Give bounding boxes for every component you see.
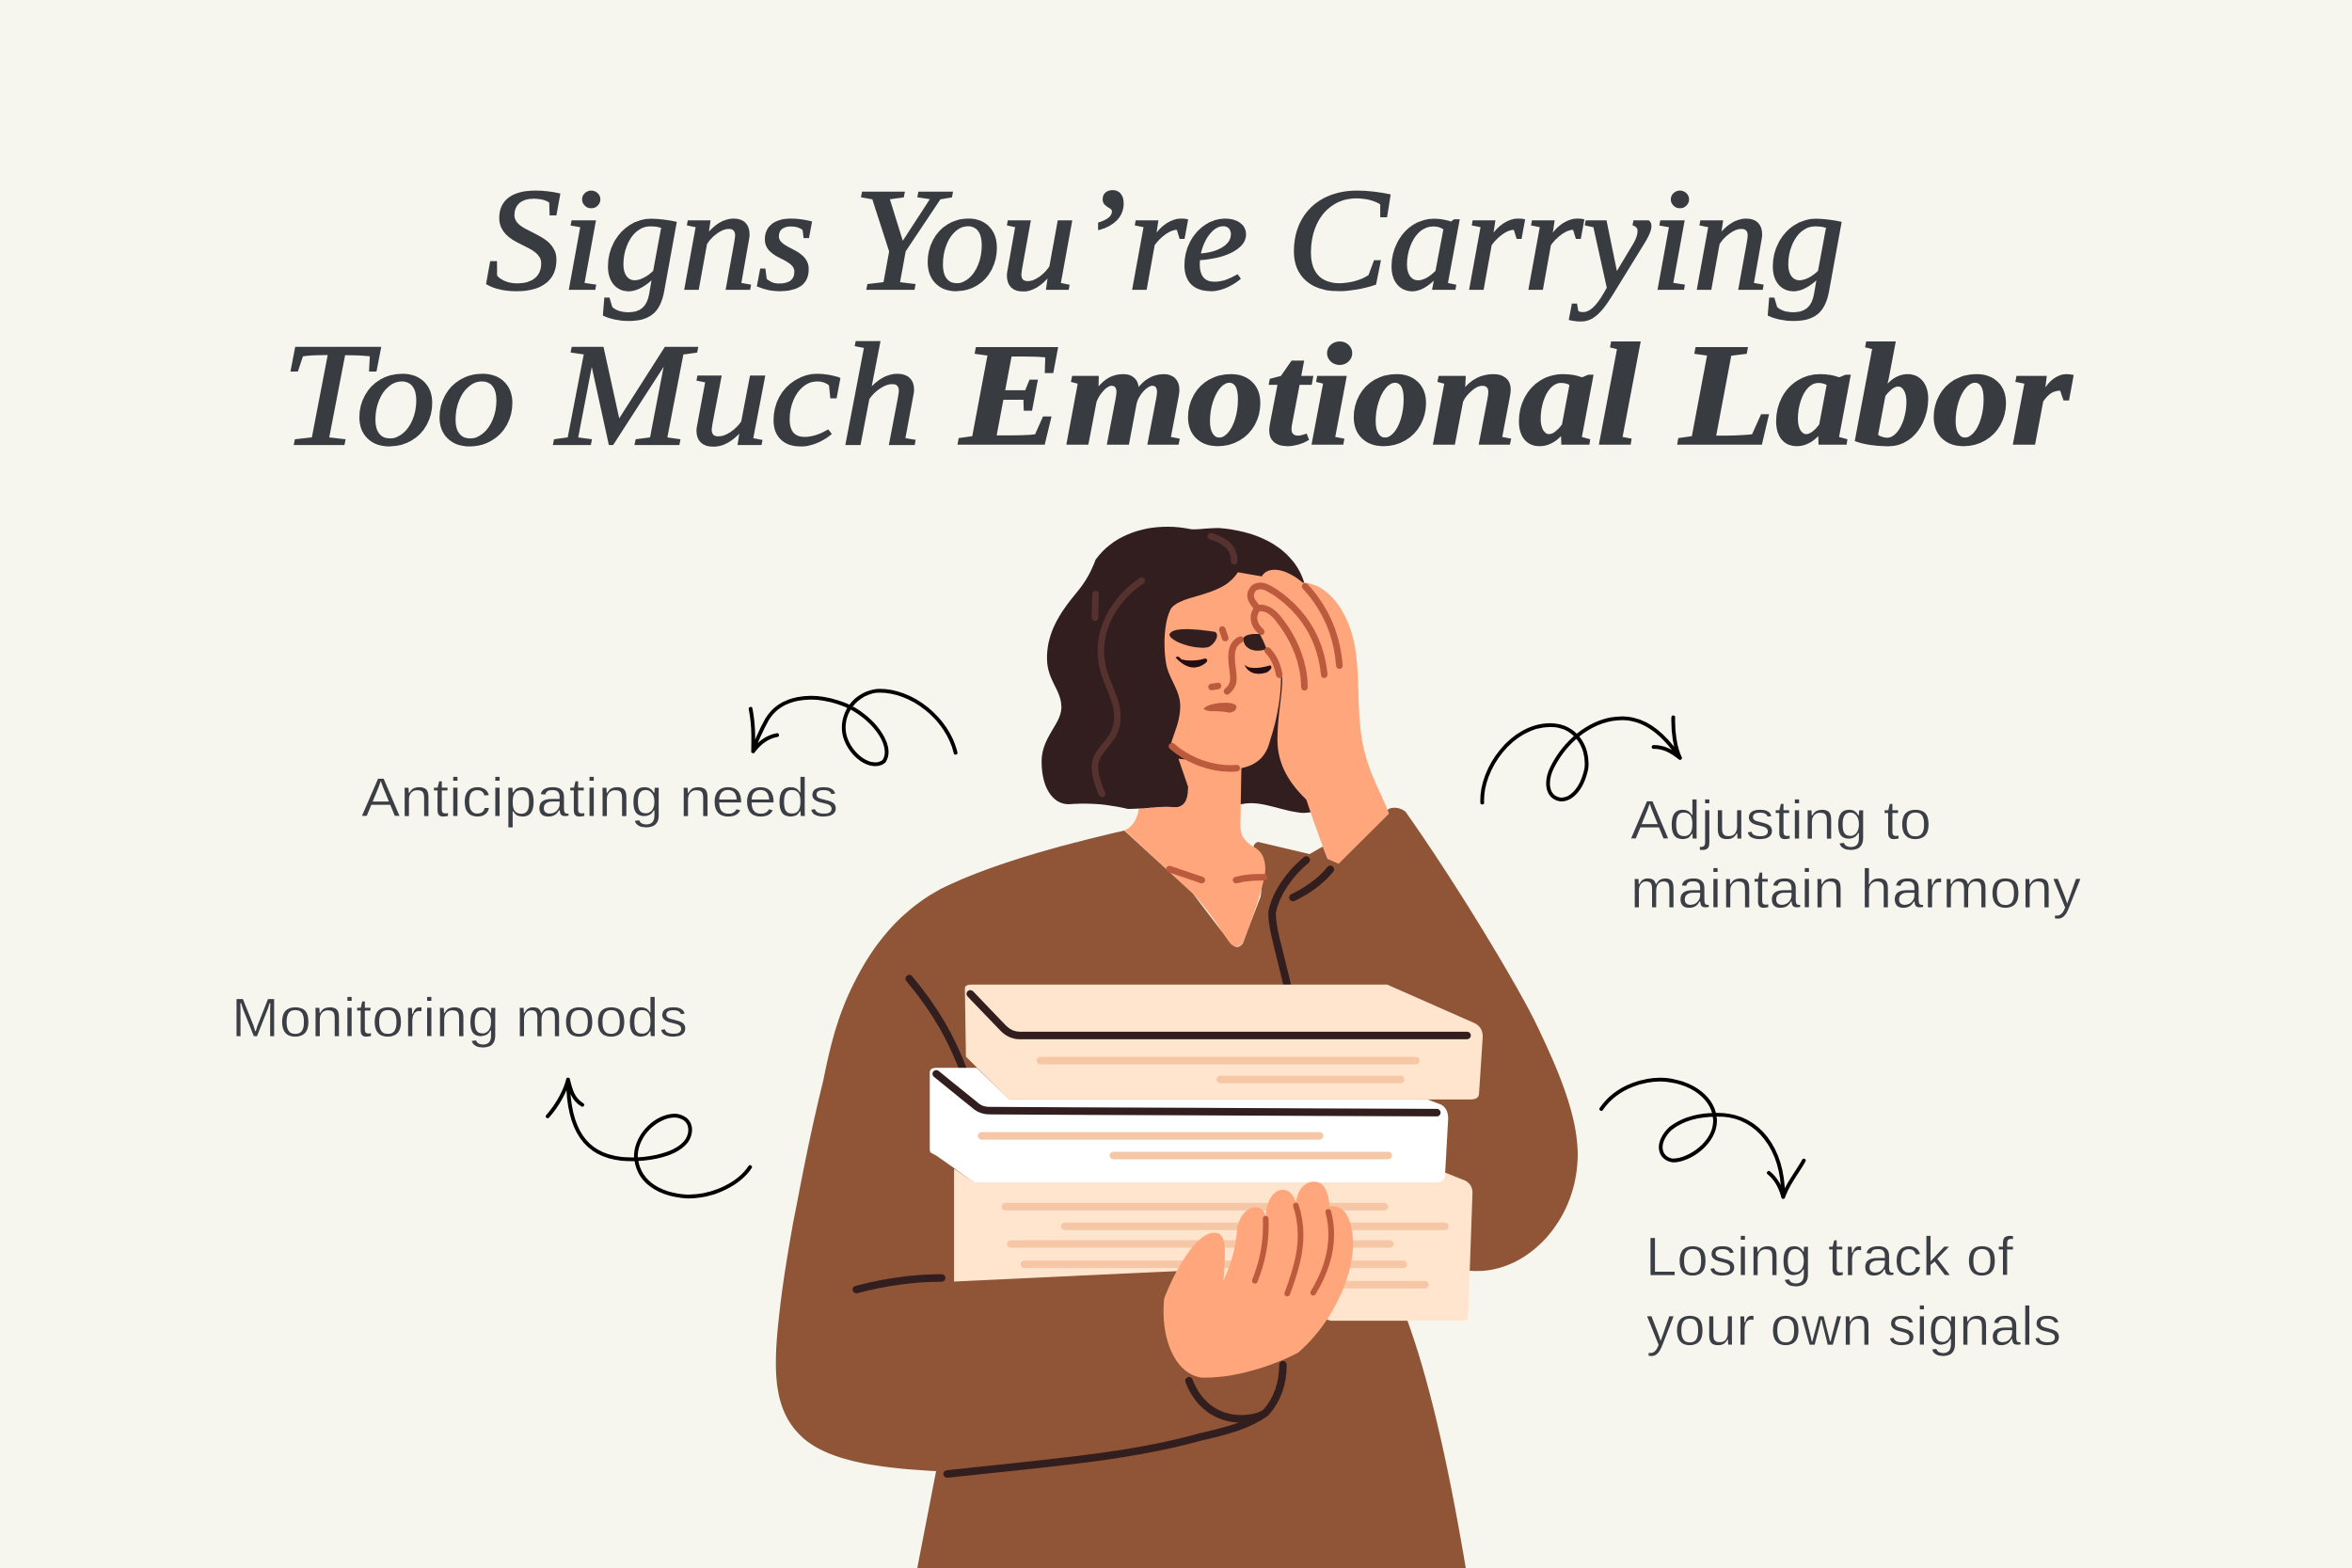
eyebrows [1169,629,1266,651]
label: adjusting to maintain harmony: Adjusting to [1630,790,1931,851]
top book spine [970,994,1467,1036]
raised hand and forearm [1260,570,1389,863]
label: anticipating needs: Anticipating needs [361,768,838,829]
arrow: to anticipating needs [751,690,956,764]
label: adjusting to maintain harmony: maintain harmony [1630,859,2081,920]
middle book [930,1068,1448,1182]
top book lines [1041,1061,1416,1080]
title: Emotional Labor [958,313,2073,476]
closed eyes [1176,657,1271,673]
hair strands [1095,536,1234,794]
body and sleeves [776,808,1578,1568]
bottom book [954,1168,1472,1321]
lower hand finger lines [1255,1206,1331,1293]
title: Too Much [281,313,921,476]
illustration: overwhelmed woman holding books [776,527,1578,1568]
jaw line [1172,746,1237,768]
finger lines [1250,586,1340,688]
bottom book lines [1006,1207,1445,1285]
title [281,158,2073,476]
middle book spine [936,1074,1437,1113]
lower hand [1164,1181,1353,1378]
arrow: to adjusting to maintain harmony [1482,718,1680,802]
title: Signs You’re Carrying [485,158,1845,321]
label: losing track of your own signals: Losing track of [1645,1227,2014,1288]
label: adjusting to maintain harmony [1630,790,2081,920]
face [1165,572,1301,768]
arrow: to monitoring moods [548,1080,750,1196]
head, neck and raised hand [1095,536,1389,985]
middle book lines [981,1136,1389,1155]
hair [1041,527,1313,813]
arm and cuff lines [856,1278,1283,1474]
label: monitoring moods: Monitoring moods [231,988,688,1049]
arrow: to losing track of your own signals [1601,1080,1804,1197]
books and lower hand [856,978,1483,1474]
nose, brow and mouth [1203,629,1240,712]
label: losing track of your own signals [1645,1227,2061,1357]
neck and chest [1124,759,1265,946]
sleeve fold line [909,978,964,1072]
collar bone marks [1169,869,1264,880]
top book [965,985,1483,1100]
label: losing track of your own signals: your own signals [1646,1296,2061,1357]
collar and sleeve lines [1272,860,1330,985]
